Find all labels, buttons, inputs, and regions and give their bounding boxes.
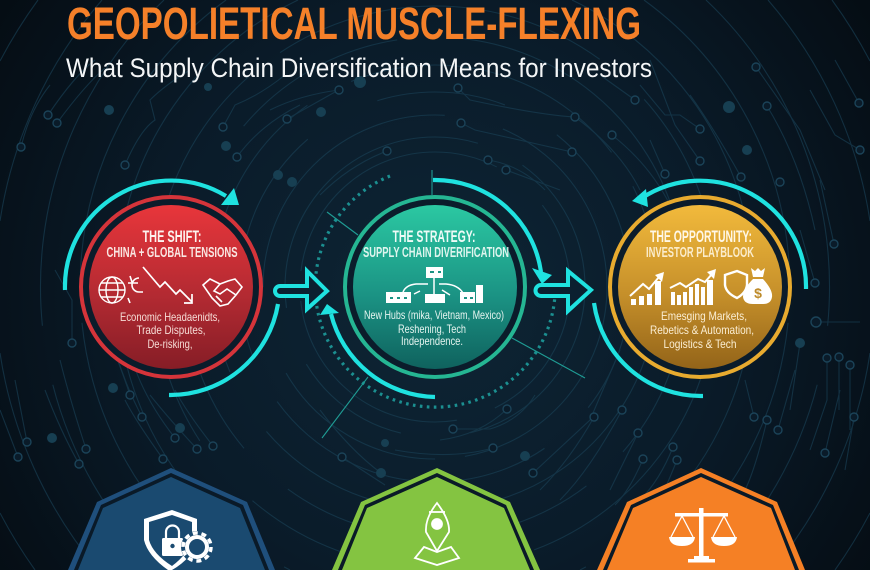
body text: De-risking, bbox=[148, 337, 192, 351]
body text bbox=[650, 309, 754, 351]
panel: the opportunity bbox=[594, 181, 806, 396]
body text bbox=[120, 310, 220, 351]
icon: supply network bbox=[386, 267, 483, 303]
body text: Trade Disputes, bbox=[136, 323, 206, 337]
body text: Independence. bbox=[401, 334, 463, 348]
icon: handshake bbox=[203, 279, 242, 306]
heading: THE STRATEGY: bbox=[392, 228, 476, 246]
cyan cycle arcs bbox=[594, 181, 806, 396]
subtitle: What Supply Chain Diversification Means for Investors bbox=[66, 53, 652, 83]
filled circuit dots bbox=[47, 76, 805, 478]
dotted teal ring bbox=[315, 176, 555, 407]
body text: Emesging Markets, bbox=[661, 309, 747, 323]
icon: falling arrow bbox=[143, 267, 192, 303]
teal ring and disc bbox=[345, 197, 525, 377]
panel: the shift bbox=[65, 181, 278, 395]
body text: Rebetics & Automation, bbox=[650, 323, 754, 337]
icon: growth chart one bbox=[630, 272, 664, 305]
icon: balance scales bbox=[669, 508, 737, 562]
icon: shield bbox=[725, 271, 747, 298]
arrow: shift to strategy bbox=[275, 271, 327, 309]
panel: blue badge bbox=[68, 468, 275, 570]
icon: security shield bbox=[144, 510, 213, 570]
subheading: INVESTOR PLAYBLOOK bbox=[646, 245, 754, 261]
panel: green badge bbox=[332, 468, 540, 570]
panel: orange badge bbox=[597, 468, 805, 570]
icon: growth chart two bbox=[670, 269, 716, 305]
cyan cycle arcs bbox=[65, 181, 278, 395]
gold ring and disc bbox=[610, 197, 790, 377]
body text: Logistics & Tech bbox=[664, 337, 736, 351]
panel: the strategy bbox=[320, 180, 552, 397]
icon: rocket on map bbox=[415, 503, 459, 565]
heading: THE OPPORTUNITY: bbox=[650, 228, 752, 246]
red ring and disc bbox=[81, 197, 261, 377]
cyan cycle arcs bbox=[320, 180, 552, 397]
body text bbox=[364, 308, 504, 348]
subheading: SUPPLY CHAIN DIVERIFICATION bbox=[363, 245, 509, 261]
subheading: CHINA + GLOBAL TENSIONS bbox=[106, 245, 238, 261]
thin teal connector lines bbox=[322, 170, 585, 438]
icon: clash bbox=[128, 276, 143, 303]
icon: money bag bbox=[743, 268, 772, 304]
body text: Economic Headaenidts, bbox=[120, 310, 220, 324]
body text: New Hubs (mika, Vietnam, Mexico) bbox=[364, 308, 504, 322]
icon: globe bbox=[99, 277, 125, 303]
icon: money bag: $ bbox=[754, 285, 762, 301]
body text: Reshening, Tech bbox=[398, 322, 466, 336]
circuit nodes bbox=[14, 63, 864, 477]
arrow: strategy to opportunity bbox=[536, 271, 591, 311]
heading: THE SHIFT: bbox=[142, 228, 202, 246]
